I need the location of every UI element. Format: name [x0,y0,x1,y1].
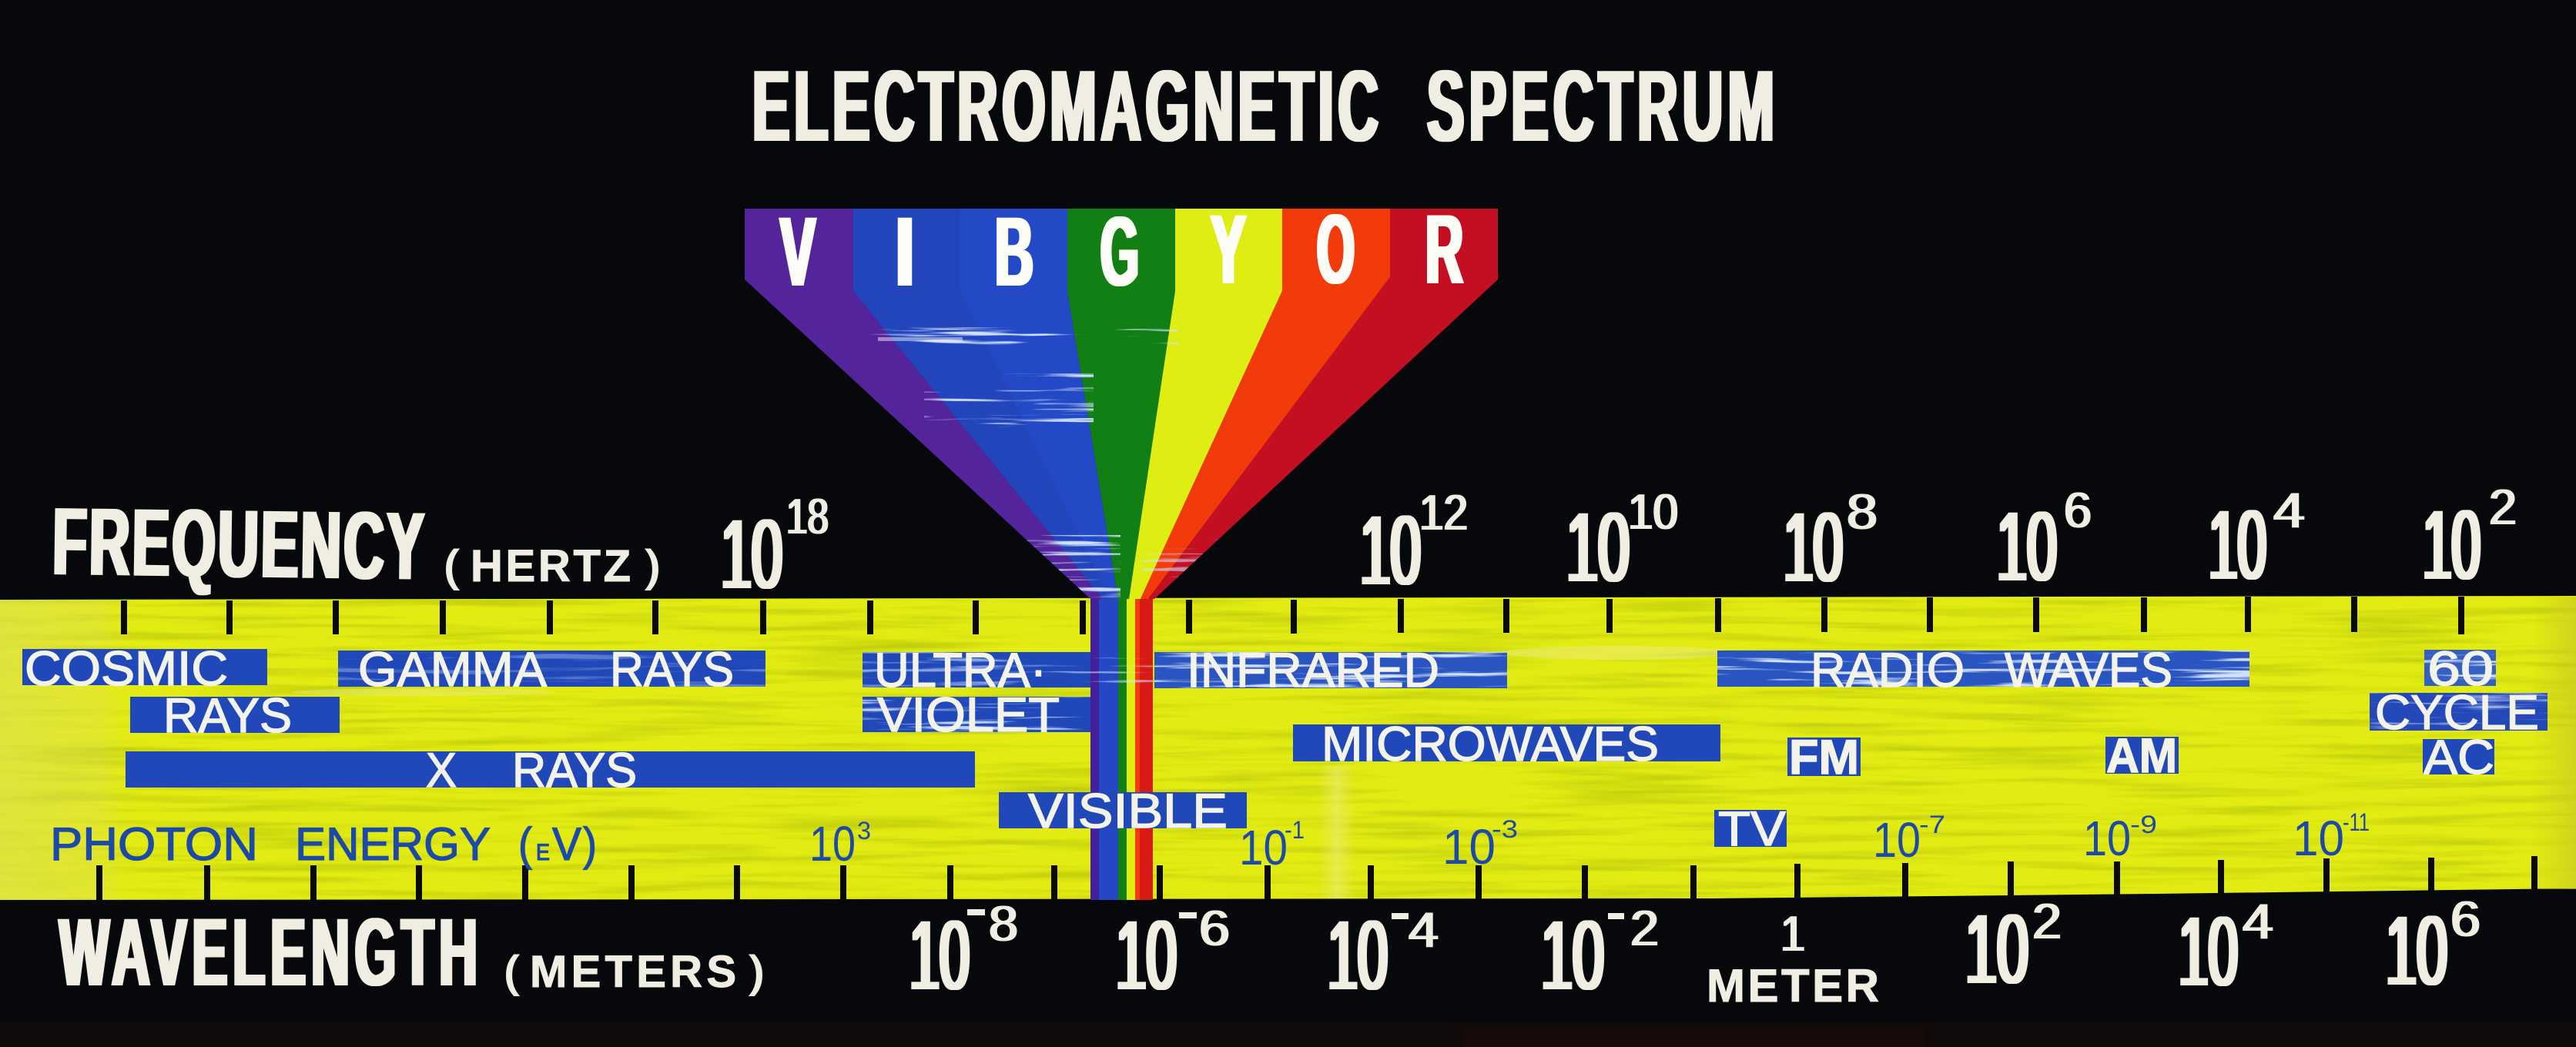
frequency axis heading: ) [645,541,660,591]
10^-8: 8 [989,895,1018,952]
bar: 60 cycle AC [2370,642,2548,784]
letter V: V [780,197,816,307]
photon energy label: ) [583,818,597,870]
bar: cosmic rays: COSMIC [25,642,228,696]
wavelength axis heading: ) [749,947,764,997]
photon energy scale values [809,808,2370,875]
bar: 60 cycle AC: 60 [2427,642,2494,696]
band: indigo and blue [853,209,1118,599]
bar: 60 cycle AC: CYCLE [2375,686,2539,740]
bar: ultraviolet: VIOLET [877,688,1060,742]
title: ELECTROMAGNETIC [752,49,1378,163]
bar: ultraviolet: ULTRA· [874,644,1047,697]
bar: radio waves [1717,644,2249,697]
10^-4: 10 [1328,901,1388,1011]
10^2: 10 [1965,895,2028,1005]
10^4: 4 [2273,482,2305,538]
yellow spectrum panel [0,596,2576,900]
bar: cosmic rays: RAYS [163,689,292,743]
photon energy label: PHOTON [50,818,258,870]
bar: visible: VISIBLE [1028,784,1228,838]
bar: x rays: RAYS [512,744,637,798]
band: red [1148,209,1498,599]
10^2: 2 [2032,893,2062,949]
band: violet [745,209,1103,599]
bar: FM: FM [1789,731,1859,784]
wavelength scale values [909,891,2481,1012]
title: SPECTRUM [1427,49,1774,163]
10^-7: -7 [1919,811,1945,838]
frequency axis heading [52,487,660,600]
region bars [22,642,2548,856]
wavelength axis heading: ( [504,947,519,997]
10^12: 10 [1360,496,1421,606]
10^-6: 6 [1199,900,1230,956]
10^4: 10 [2209,490,2266,600]
10^-2: 2 [1630,900,1659,956]
10^-9: -9 [2130,811,2157,838]
10^6: 6 [2064,482,2092,538]
10^10: 10 [1566,493,1630,603]
prism fan: visible colours VIBGYOR: O [1317,195,1355,305]
10^4: 10 [2179,897,2238,1007]
bottom wavelength tick marks [96,856,2537,900]
bar: cosmic rays [22,642,340,743]
letter G: G [1100,197,1139,307]
wavelength axis heading: METERS [530,947,736,997]
bar: x rays [126,744,975,798]
visible light column through panel [1090,599,1153,900]
photon energy label: ( [518,818,532,870]
10^6: 6 [2450,891,2481,947]
prism fan: visible colours VIBGYOR [745,195,1498,599]
photon energy label [50,818,597,870]
photon energy label: ENERGY [295,818,491,870]
10^6: 10 [2386,896,2447,1006]
wavelength axis heading [59,899,764,1006]
10^3: 10 [809,816,856,871]
band: yellow [1129,209,1282,599]
photon energy label: V [552,818,581,870]
10^-3: 10 [1442,819,1496,875]
letter I: I [895,197,915,307]
bar: radio waves: WAVES [2005,644,2172,697]
10^6: 10 [1997,492,2057,602]
bar: ultraviolet [863,644,1090,742]
photon energy label: E [536,840,550,865]
bar: gamma rays: GAMMA [358,643,547,697]
10^-8: 10 [909,901,970,1011]
1 meter: 1 [1780,905,1805,962]
10^18: 10 [721,500,782,610]
title [752,49,1774,163]
frequency axis heading: FREQUENCY [52,487,425,600]
bar: x rays: X [426,744,457,798]
10^-7: 10 [1873,812,1921,868]
10^2: 10 [2423,490,2481,600]
band: green [1067,209,1175,599]
band: orange [1141,209,1390,599]
10^18: 18 [786,488,829,544]
bar: gamma rays [338,643,765,697]
10^10: 10 [1628,483,1678,540]
10^-4: 4 [1409,901,1439,958]
10^-3: -3 [1492,815,1518,843]
10^8: 10 [1784,493,1843,603]
wavelength axis heading: WAVELENGTH [59,899,477,1006]
letter B: B [995,197,1033,307]
10^-6: 10 [1116,901,1177,1011]
top frequency tick marks [121,597,2464,634]
bar: TV: TV [1718,802,1786,856]
10^-2: 10 [1541,901,1604,1011]
10^-11: 10 [2293,811,2344,866]
1 meter: METER [1707,960,1879,1012]
10^3: 3 [857,817,871,845]
10^2: 2 [2489,479,2517,535]
frequency scale values [721,479,2517,610]
10^8: 8 [1847,483,1878,540]
10^12: 12 [1419,484,1468,540]
letter Y: Y [1211,195,1246,305]
letter R: R [1425,195,1463,305]
10^4: 4 [2243,893,2273,949]
bar: 60 cycle AC: AC [2424,731,2494,784]
bar: microwaves: MICROWAVES [1321,718,1659,771]
10^-11 [2293,808,2370,866]
bar: radio waves: RADIO [1811,644,1965,697]
10^-1: 10 [1239,820,1288,875]
frequency axis heading: HERTZ [471,541,631,591]
1 meter [1707,905,1879,1012]
10^-9: 10 [2083,811,2131,866]
frequency axis heading: ( [444,541,459,591]
10^-11: -11 [2343,808,2370,836]
bar: infrared: INFRARED [1187,644,1439,697]
10^-3 [1442,815,1518,875]
bar: gamma rays: RAYS [610,643,734,697]
bar: AM: AM [2106,729,2177,783]
10^-1: -1 [1285,816,1305,844]
